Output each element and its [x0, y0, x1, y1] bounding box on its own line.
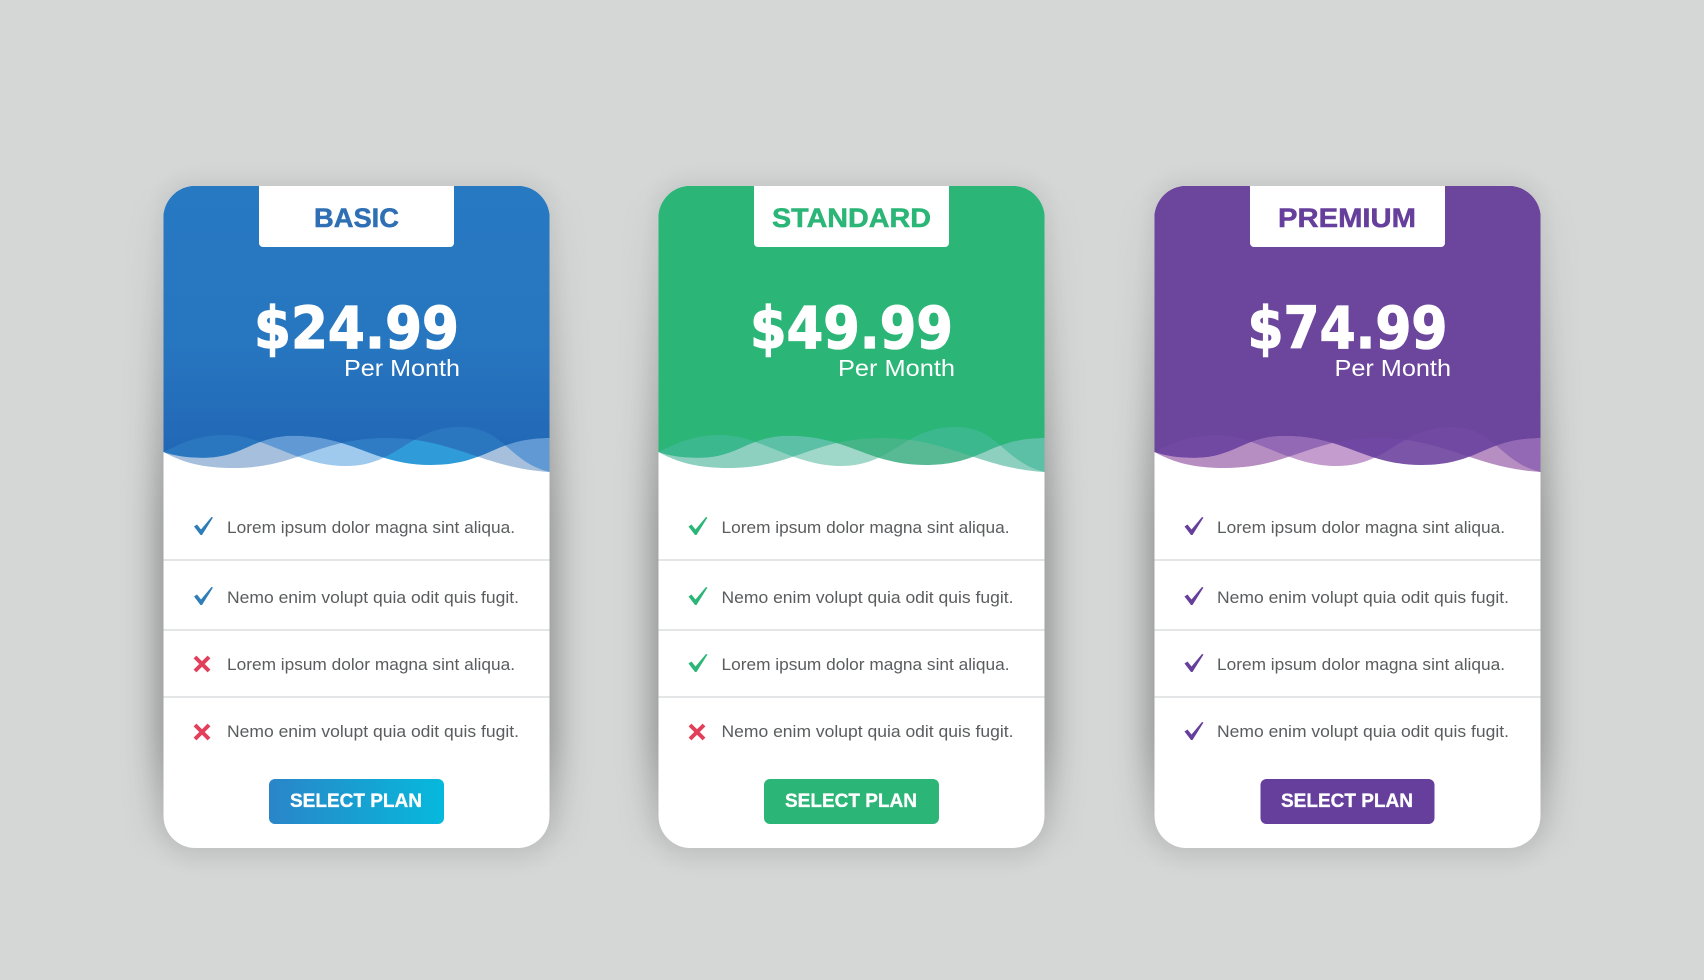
plan tab — [1250, 186, 1445, 247]
per month: Per Month — [838, 355, 955, 381]
card shadow — [1143, 180, 1552, 860]
feature row 4: Nemo enim volupt quia odit quis fugit. — [1217, 722, 1509, 741]
card shadow — [152, 180, 561, 860]
panel: basic plan — [152, 180, 561, 860]
feature row 1: Lorem ipsum dolor magna sint aliqua. — [1217, 518, 1505, 537]
price: $24.99 — [254, 294, 459, 362]
select plan button: SELECT PLAN — [1281, 791, 1413, 812]
feature row 4: Nemo enim volupt quia odit quis fugit. — [722, 722, 1014, 741]
card body — [1154, 186, 1540, 848]
feature row 2: Nemo enim volupt quia odit quis fugit. — [227, 588, 519, 607]
per month: Per Month — [344, 355, 460, 381]
card body — [164, 186, 550, 848]
header with waves — [164, 180, 550, 472]
plan name: PREMIUM — [1278, 203, 1416, 233]
feature row 2: Nemo enim volupt quia odit quis fugit. — [722, 588, 1014, 607]
feature row 4: Nemo enim volupt quia odit quis fugit. — [227, 722, 519, 741]
plan name: STANDARD — [772, 203, 931, 233]
select plan button — [1260, 779, 1434, 824]
panel: standard plan — [647, 180, 1056, 860]
feature row 1: Lorem ipsum dolor magna sint aliqua. — [722, 518, 1010, 537]
feature row 1: Lorem ipsum dolor magna sint aliqua. — [227, 518, 515, 537]
card body — [658, 186, 1044, 848]
price: $74.99 — [1248, 294, 1448, 362]
select plan button: SELECT PLAN — [290, 791, 422, 812]
header with waves — [658, 180, 1044, 472]
feature row 3: Lorem ipsum dolor magna sint aliqua. — [722, 655, 1010, 674]
feature row 2: Nemo enim volupt quia odit quis fugit. — [1217, 588, 1509, 607]
select plan button: SELECT PLAN — [785, 791, 917, 812]
plan tab — [259, 186, 454, 247]
feature row 3: Lorem ipsum dolor magna sint aliqua. — [1217, 655, 1505, 674]
header with waves — [1154, 180, 1540, 472]
per month: Per Month — [1334, 355, 1451, 381]
feature row 3: Lorem ipsum dolor magna sint aliqua. — [227, 655, 515, 674]
price: $49.99 — [750, 294, 953, 362]
select plan button — [764, 779, 939, 824]
select plan button — [269, 779, 444, 824]
panel: premium plan — [1143, 180, 1552, 860]
card shadow — [647, 180, 1056, 860]
plan tab — [754, 186, 949, 247]
plan name: BASIC — [314, 203, 399, 233]
